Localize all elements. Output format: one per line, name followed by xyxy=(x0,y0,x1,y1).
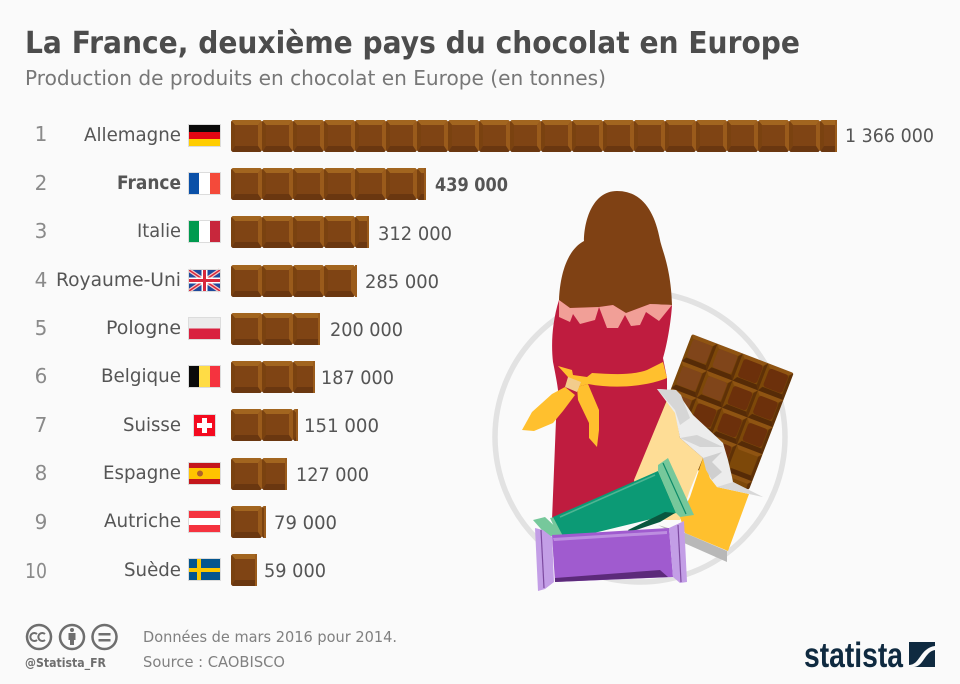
country: Italie xyxy=(137,220,181,242)
value: 151 000 xyxy=(304,415,379,437)
value: 439 000 xyxy=(435,174,508,196)
wrapper: grey edge xyxy=(658,525,727,562)
decorative ring xyxy=(495,292,785,582)
statista handle: @Statista_FR xyxy=(25,656,106,671)
row 2: France xyxy=(35,168,508,200)
row 5: Pologne xyxy=(35,313,403,345)
value: 312 000 xyxy=(378,223,452,245)
country: Belgique xyxy=(101,365,181,387)
chocolate figure: brown top xyxy=(559,191,672,313)
row 6: Belgique xyxy=(35,361,394,393)
bar xyxy=(231,120,837,152)
title: La France, deuxième pays du chocolat en Europe xyxy=(25,26,800,61)
bar xyxy=(231,216,369,248)
row 7: Suisse xyxy=(35,409,379,441)
source: Source : CAOBISCO xyxy=(143,653,285,671)
row 1: Allemagne xyxy=(35,120,934,152)
rank: 4 xyxy=(35,268,47,292)
bar xyxy=(231,168,426,200)
rank: 2 xyxy=(35,171,47,195)
country: Autriche xyxy=(104,510,181,532)
value: 200 000 xyxy=(330,319,403,341)
bar xyxy=(231,313,320,345)
note: Données de mars 2016 pour 2014. xyxy=(143,628,397,646)
flag: Belgium xyxy=(188,366,220,388)
rank: 3 xyxy=(35,219,47,243)
wrapper: cream inside xyxy=(634,389,703,520)
bar xyxy=(231,361,315,393)
purple candy bar xyxy=(535,521,687,591)
bar xyxy=(231,554,257,586)
value: 187 000 xyxy=(321,367,394,389)
country: Allemagne xyxy=(84,124,181,146)
country: Suède xyxy=(124,559,181,581)
country: Espagne xyxy=(103,462,181,484)
flag: Austria xyxy=(188,510,220,532)
flag: Italy xyxy=(188,220,220,242)
statista logo: statista xyxy=(804,636,903,675)
chocolate figure: red wrapper xyxy=(552,300,672,520)
flag: Spain xyxy=(188,462,220,484)
row 10: Suède xyxy=(25,554,326,586)
licence icons xyxy=(27,625,116,649)
rank: 10 xyxy=(25,559,47,583)
chocolate bar xyxy=(647,334,794,490)
silver foil xyxy=(657,389,763,497)
country: Suisse xyxy=(123,414,181,436)
row 9: Autriche xyxy=(35,506,337,538)
bar xyxy=(231,409,298,441)
flag: France xyxy=(188,172,220,194)
rank: 8 xyxy=(35,461,47,485)
rank: 7 xyxy=(35,413,47,437)
rank: 5 xyxy=(35,316,47,340)
value: 59 000 xyxy=(264,560,326,582)
rank: 9 xyxy=(35,510,47,534)
illustration: chocolate assortment xyxy=(495,191,794,591)
value: 79 000 xyxy=(274,512,337,534)
country: Royaume-Uni xyxy=(56,269,181,291)
value: 127 000 xyxy=(296,464,369,486)
flag: Germany xyxy=(188,124,220,146)
row 3: Italie xyxy=(35,216,452,248)
ribbon xyxy=(522,362,667,447)
row 4: Royaume-Uni xyxy=(35,265,439,297)
value: 1 366 000 xyxy=(845,125,934,147)
green candy bar xyxy=(533,458,694,540)
subtitle: Production de produits en chocolat en Europe (en tonnes) xyxy=(25,66,606,90)
bar xyxy=(231,458,287,490)
flag: UK xyxy=(188,270,220,292)
country: Pologne xyxy=(106,317,181,339)
flag: Sweden xyxy=(188,558,220,580)
rank: 1 xyxy=(35,122,47,146)
torn foil edge xyxy=(559,300,672,328)
flag: Poland xyxy=(188,318,220,340)
row 8: Espagne xyxy=(35,458,369,490)
flag: Switzerland xyxy=(194,414,216,436)
bar xyxy=(231,506,266,538)
wrapper: gold outside xyxy=(680,458,749,551)
value: 285 000 xyxy=(365,271,439,293)
rank: 6 xyxy=(35,364,47,388)
bar xyxy=(231,265,357,297)
country: France xyxy=(117,172,181,194)
